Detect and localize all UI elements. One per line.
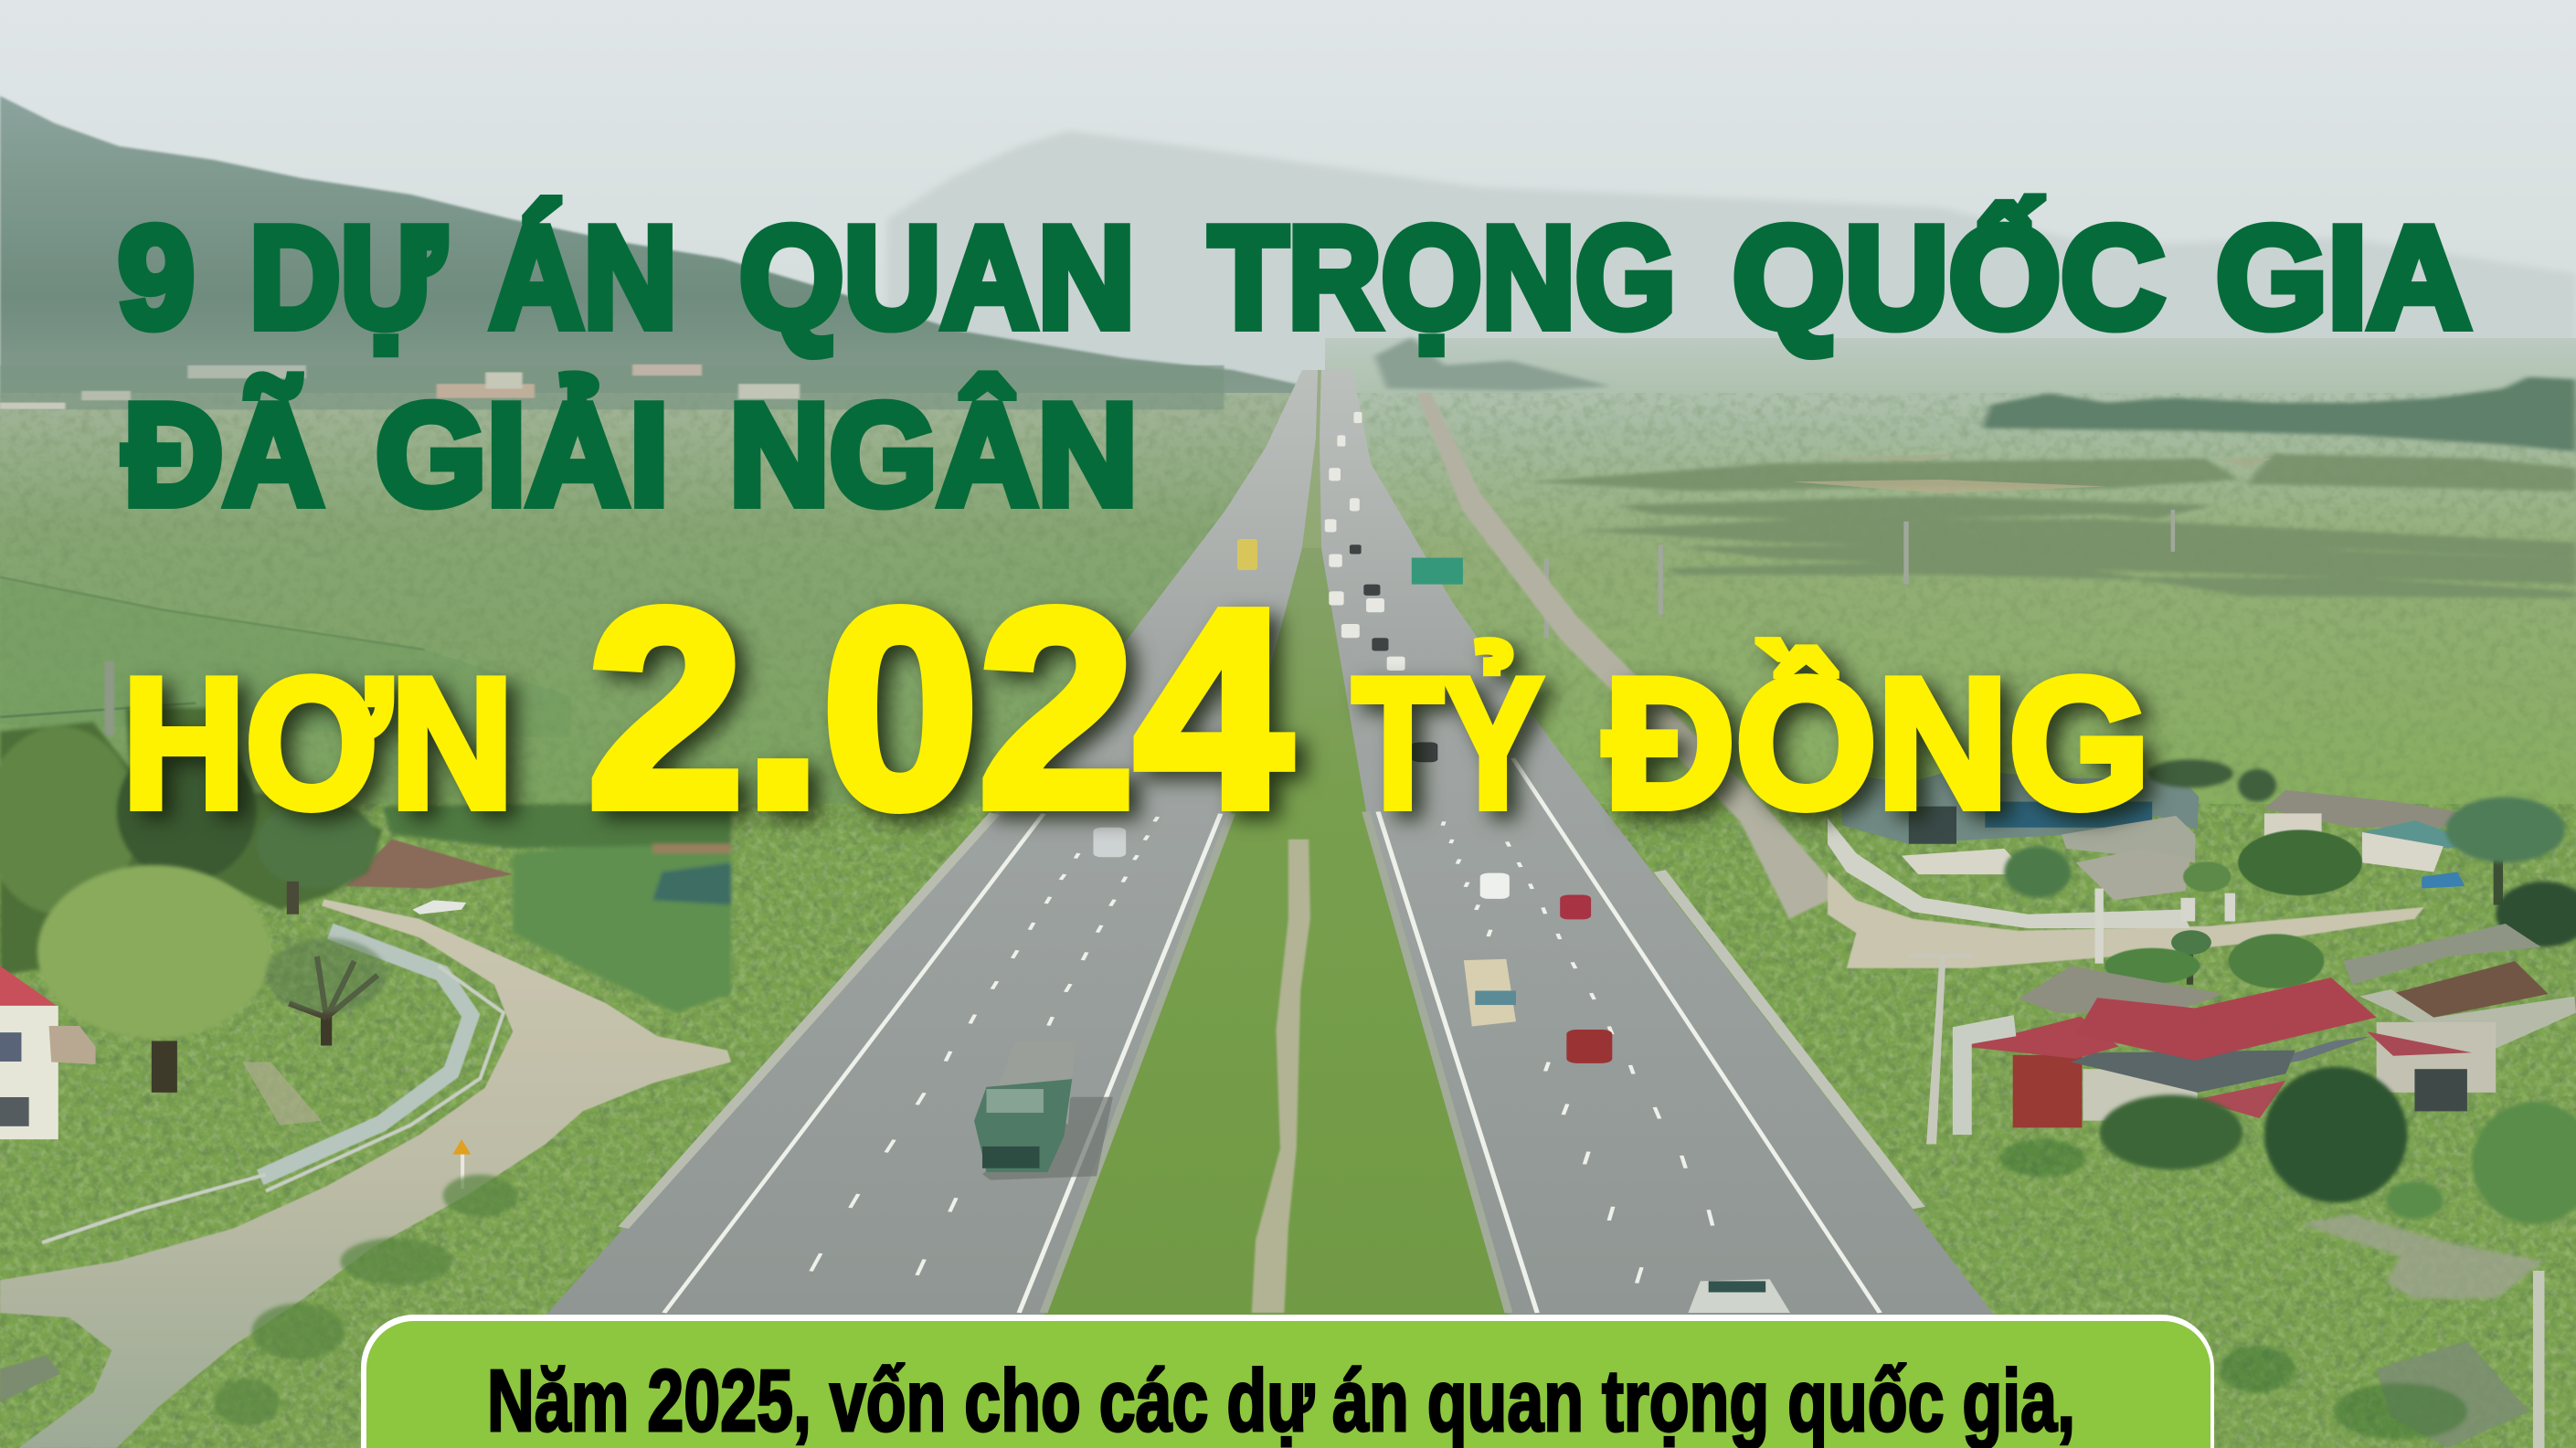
small palm: [2171, 930, 2211, 985]
word HƠN: HƠN: [122, 639, 514, 848]
lower left scene: [0, 708, 731, 1448]
figure 2.024: 2.024: [588, 552, 1293, 866]
title line one: QUAN: [739, 197, 1135, 358]
dark shrubs along highway bank: [215, 1175, 517, 1425]
title line two: GIẢI: [376, 375, 669, 535]
brown roof building: [2359, 961, 2576, 1093]
small house at left edge: [0, 966, 96, 1139]
soil patch: [345, 840, 513, 889]
central ditch: [1252, 840, 1310, 1313]
vehicle: white car left: [1093, 828, 1126, 857]
stepping path: [242, 1062, 322, 1126]
guard rails: [623, 811, 1919, 1313]
side road: [1828, 872, 2424, 968]
warning sign: [452, 1139, 471, 1189]
dark tree group: [0, 708, 382, 976]
shrubs front of house: [2100, 1094, 2242, 1170]
grass texture light: [0, 804, 2576, 1448]
left field details: [0, 577, 571, 738]
background sky: [0, 0, 2576, 475]
vehicle: red car upper: [1560, 895, 1591, 919]
right carriageway: [1320, 370, 1995, 1316]
title line two: [123, 375, 1138, 535]
small yellow bus far left lane: [1237, 539, 1257, 570]
light leafy tree: [37, 865, 270, 1093]
blue tarp: [2422, 872, 2465, 889]
headline amount in yellow: [122, 552, 2150, 866]
curved wall and rail: [42, 931, 504, 1242]
vehicle: bus at bottom edge: [1688, 1279, 1790, 1313]
vehicle: green truck: [974, 1041, 1113, 1180]
highway: [546, 370, 1995, 1316]
banana trees: [2004, 846, 2071, 898]
title: green heading: [118, 197, 2471, 535]
vehicle: red car lower: [1566, 1030, 1612, 1063]
field texture overlay: [0, 393, 2576, 804]
grey roof house upper right: [2264, 790, 2476, 872]
trees right: [2386, 1102, 2576, 1224]
utility pole: [1909, 954, 1973, 1144]
right field: [1325, 338, 2576, 813]
fence wall: [1953, 1015, 2016, 1135]
lower ground: [0, 804, 2576, 1448]
title line two: ĐÃ: [123, 375, 323, 535]
word ĐỒNG: ĐỒNG: [1604, 639, 2150, 848]
gravel roofs behind: [2019, 966, 2224, 1013]
title line one: QUỐC: [1733, 197, 2165, 358]
vehicle: dark car: [1413, 743, 1437, 762]
highway markings in scaled coordinates: [623, 743, 1919, 1313]
left field: [0, 393, 1325, 850]
small pole bottom right: [2533, 1271, 2544, 1448]
lane dashes: [811, 817, 1712, 1284]
title line one: TRỌNG: [1209, 197, 1676, 358]
left carriageway: [546, 370, 1318, 1316]
tree line: [1374, 337, 2576, 451]
highway sign: [1412, 558, 1463, 585]
dark trees near fields: [2147, 759, 2276, 802]
rocky ground: [2300, 1214, 2543, 1299]
long white wall: [1828, 819, 2190, 928]
median grass texture: [1285, 548, 1352, 733]
word TỶ: TỶ: [1352, 639, 1542, 848]
title line one: [118, 197, 2471, 358]
distant traffic: [1325, 412, 1463, 761]
dark grass patches: [1999, 1139, 2467, 1440]
title line two: NGÂN: [729, 375, 1138, 535]
tree trunk behind: [287, 882, 299, 914]
utility poles: [1544, 510, 2175, 638]
palm tree: [2445, 797, 2565, 904]
vehicle: white car right: [1480, 873, 1510, 899]
crop strips: [1528, 454, 2576, 598]
grey concrete mound: [2377, 1341, 2529, 1448]
vegetable plots: [382, 802, 731, 1013]
dark trees at right edge: [2496, 882, 2576, 947]
shoulders and edge lines: [664, 758, 1880, 1313]
shrubs by warehouse: [2183, 861, 2231, 892]
village band on left: [0, 365, 1224, 409]
title line one: DỰ: [249, 197, 446, 358]
right field details: tree line and crops: [1374, 337, 2576, 638]
far mountain: [887, 131, 2576, 429]
vehicle: coach: [1464, 959, 1516, 1026]
title line one: 9: [118, 197, 195, 358]
median strip: [1044, 370, 1509, 1316]
dark round tree: [2264, 1067, 2408, 1203]
title line one: ÁN: [490, 197, 677, 358]
warehouses: [1842, 769, 2199, 900]
frontage road on right: [1416, 393, 1839, 919]
panel: green callout: [361, 1315, 2214, 1448]
concrete box: [0, 1355, 60, 1402]
bare tree: [266, 937, 387, 1046]
left forested hill: [0, 96, 1316, 429]
title line one: GIA: [2216, 197, 2471, 358]
main red roof house: [1964, 978, 2472, 1127]
small curved road: [0, 899, 731, 1448]
shrub row behind house: [2104, 934, 2324, 988]
lower right scene: [1828, 759, 2576, 1448]
grass texture dark: [0, 804, 2576, 1448]
gate posts: [2094, 889, 2235, 964]
tree cluster middle right: [2238, 830, 2362, 895]
white sack: [413, 900, 466, 914]
